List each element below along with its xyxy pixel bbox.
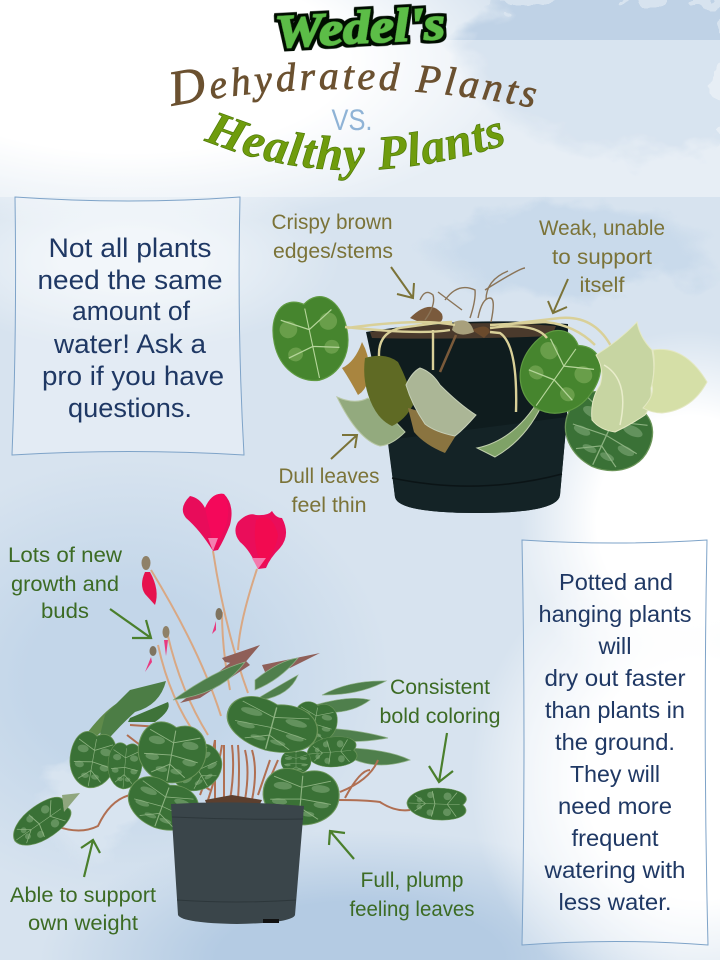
arrow: plump xyxy=(329,831,354,859)
dehydrated plant photo xyxy=(267,268,707,513)
advice text: need the same xyxy=(38,265,222,295)
label: plump xyxy=(350,869,474,921)
bright heart leaf xyxy=(267,292,356,388)
arrow: dull xyxy=(331,435,357,459)
label: coloring: bold coloring xyxy=(380,705,500,728)
pale leaf xyxy=(592,322,654,432)
label: dull xyxy=(278,465,380,517)
pot xyxy=(366,321,568,513)
arrow: weak xyxy=(548,279,568,313)
flower stems xyxy=(151,551,257,738)
title: Dehydrated Plants: Dehydrated Plants xyxy=(171,62,536,107)
buds xyxy=(142,556,222,672)
label: crispy: Crispy brown xyxy=(272,211,392,234)
pale grey-green leaf xyxy=(406,368,476,436)
label: coloring: Consistent xyxy=(390,676,490,699)
leaf: upper centre xyxy=(221,690,323,762)
pot xyxy=(171,802,304,924)
reddish upper leaves xyxy=(180,645,320,703)
label: weak: itself xyxy=(580,274,625,297)
arrow: crispy xyxy=(391,267,414,298)
arrow: coloring xyxy=(429,733,453,782)
potted text: need more xyxy=(558,793,672,819)
label: support: Able to support xyxy=(10,884,156,907)
label: growth: Lots of new xyxy=(8,544,123,567)
leaf: far left drooping xyxy=(5,791,76,855)
label: support: own weight xyxy=(28,912,138,935)
leaf: left centre xyxy=(133,718,210,788)
strip leaf xyxy=(477,398,542,457)
flower: top left xyxy=(183,494,232,551)
label: crispy xyxy=(272,211,393,263)
logo: Wedel's: Wedel's xyxy=(274,0,446,58)
vs label: VS. xyxy=(332,104,372,137)
label: coloring xyxy=(380,676,500,728)
potted text: frequent xyxy=(572,825,659,851)
soil and debris xyxy=(370,323,556,339)
label: crispy: edges/stems xyxy=(273,240,393,263)
flower: top right xyxy=(235,511,286,569)
back leaves xyxy=(173,658,410,765)
panel: potted plants xyxy=(522,540,708,945)
advice text: questions. xyxy=(68,393,192,423)
label: weak: Weak, unable xyxy=(539,217,665,240)
title: Healthy Plants: Healthy Plants xyxy=(203,112,504,181)
label: support xyxy=(10,884,156,935)
hanging bud flower xyxy=(142,572,157,605)
label: growth: growth and xyxy=(11,573,119,596)
callouts: dehydrated xyxy=(272,211,665,517)
potted text: dry out faster xyxy=(544,665,686,691)
limp pale leaf xyxy=(337,397,405,446)
potted text: watering with xyxy=(543,857,686,883)
arrow: growth xyxy=(110,609,151,638)
advice text: amount of xyxy=(72,296,190,326)
potted text: They will xyxy=(570,761,660,787)
stems xyxy=(345,318,612,412)
callouts: healthy xyxy=(8,544,500,935)
label: plump: feeling leaves xyxy=(350,898,474,921)
advice text: Not all plants xyxy=(48,233,212,263)
dark lower-right leaf xyxy=(552,382,662,485)
label: dull: Dull leaves xyxy=(278,465,380,488)
leaf: far right xyxy=(406,787,467,821)
dry leaf: crispy brown xyxy=(342,342,369,395)
potted text: the ground. xyxy=(555,729,675,755)
title: Dehydrated Plants xyxy=(171,62,536,107)
potted text: than plants in xyxy=(545,697,685,723)
pale right leaf xyxy=(643,349,707,413)
potted text: less water. xyxy=(558,889,672,915)
panel: water advice xyxy=(12,197,244,455)
label: growth: buds xyxy=(41,600,89,623)
side leaves xyxy=(65,729,120,792)
leaf: lower left xyxy=(121,770,205,840)
limp olive leaf xyxy=(364,356,413,426)
arrow: support xyxy=(81,840,100,877)
advice text xyxy=(38,233,224,423)
mid-right green leaf xyxy=(504,320,612,429)
label: dull: feel thin xyxy=(292,494,366,517)
potted text: will xyxy=(597,633,632,659)
label: plump: Full, plump xyxy=(360,869,464,892)
leaf: lower right xyxy=(261,766,341,828)
brown withered leaf xyxy=(408,408,458,453)
healthy plant photo xyxy=(5,494,467,924)
potted text: hanging plants xyxy=(538,601,692,627)
label: growth xyxy=(8,544,123,623)
stems and crown xyxy=(56,725,410,830)
potted text xyxy=(538,569,692,915)
potted text: Potted and xyxy=(559,569,673,595)
advice text: water! Ask a xyxy=(53,329,207,359)
advice text: pro if you have xyxy=(42,361,224,391)
label: weak xyxy=(539,217,665,297)
label: weak: to support xyxy=(552,246,652,269)
